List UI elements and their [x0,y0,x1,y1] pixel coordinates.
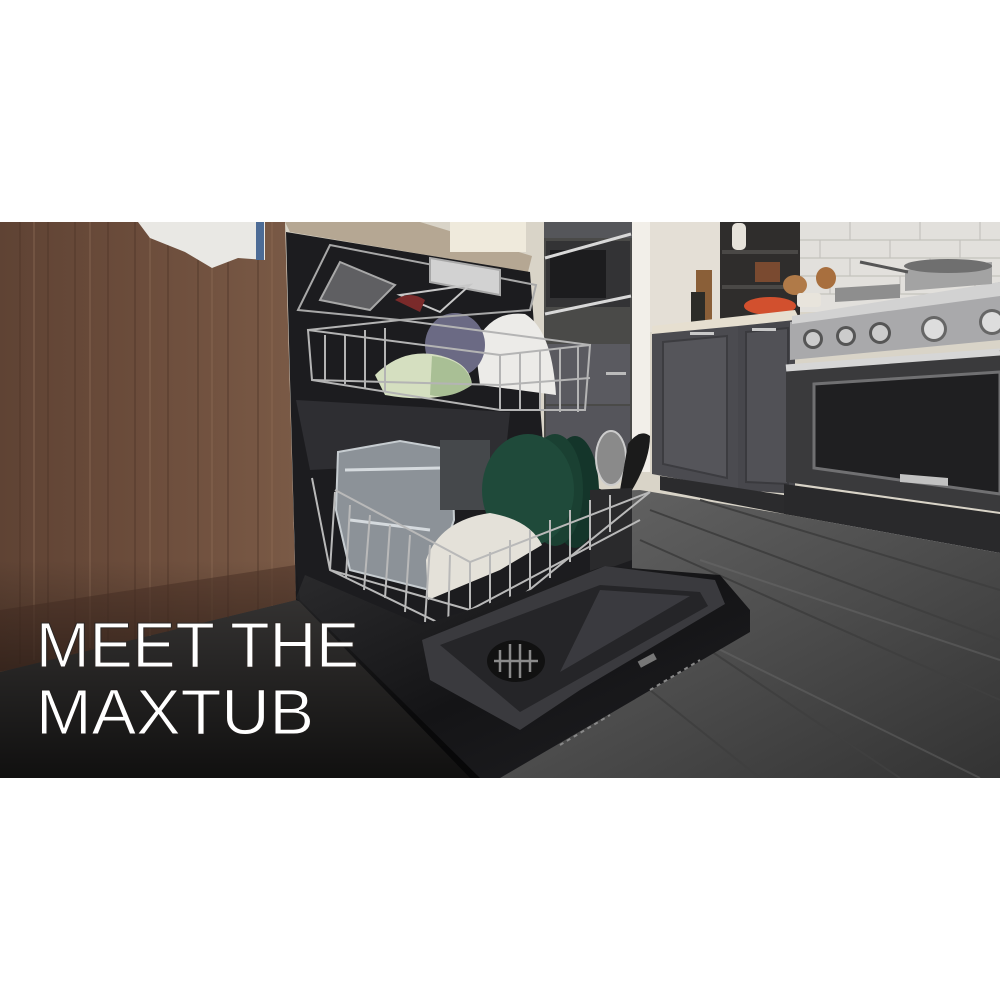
wall pillar [650,222,720,332]
doorway light [450,222,526,252]
utensil basket [590,488,632,575]
towel [138,222,265,268]
pots on range [797,259,992,307]
tub side wall highlights [296,400,510,470]
whisk [596,431,626,485]
right floor [500,490,1000,778]
glass container [336,441,454,590]
countertop right [652,310,800,334]
white cloth [426,513,542,600]
cabinets [652,320,795,515]
left floor [0,590,480,778]
spatula [620,433,650,490]
lower rack wires [312,478,650,638]
title [36,609,359,748]
glass jar [440,440,490,510]
title: MAXTUB [36,676,314,748]
upper rack wires [308,320,590,412]
wood cabinet panel [0,222,296,672]
lower dishes [336,431,650,600]
white bowl stack [475,314,556,395]
countertop over dishwasher [285,222,532,272]
open dishwasher door [296,566,750,778]
top cutlery rack [298,245,536,320]
wall oven stack [544,222,632,472]
lavender plate [425,313,485,377]
door drain vent [487,640,545,682]
door control labels [560,660,700,745]
back wall [280,222,1000,522]
pale green bowl [375,353,472,398]
upper dishes [375,313,556,398]
title: MEET THE [36,609,359,681]
bottom-left darkening [0,560,480,778]
subway tile wall [800,222,1000,312]
open shelves with items [691,222,836,322]
photo: kitchen scene [0,222,1000,778]
range [784,282,1000,553]
green plates [565,436,599,548]
infographic canvas [0,222,1000,778]
dishwasher tub interior [286,232,632,625]
towel stripe [256,222,264,260]
